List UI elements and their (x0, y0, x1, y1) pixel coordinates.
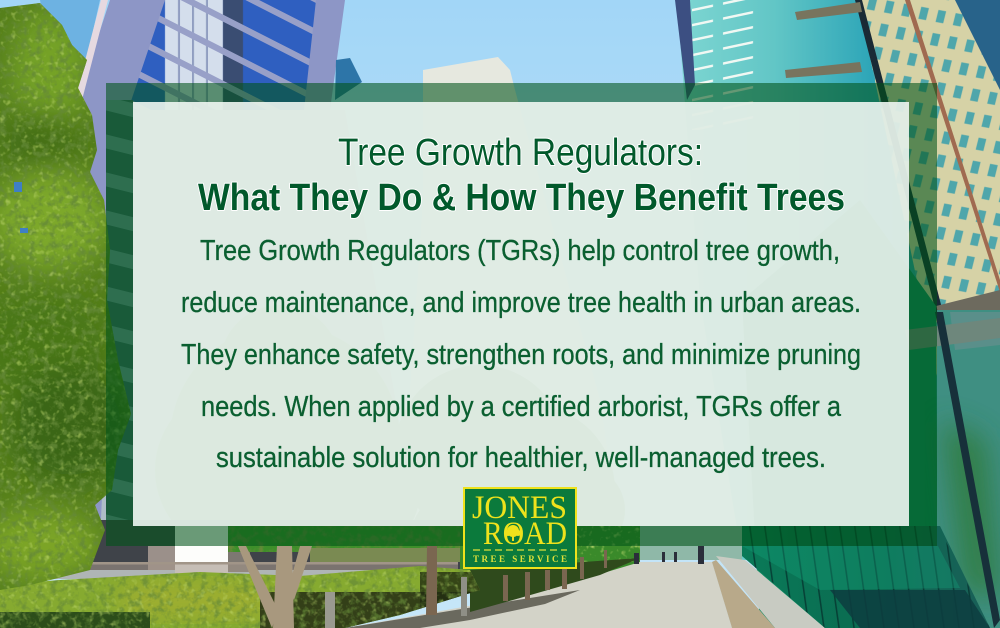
logo: Jones Road Tree Service: JONES (472, 490, 567, 526)
icon: tree in the O (505, 525, 521, 541)
right glass tower (675, 0, 1000, 628)
body paragraph: Tree Growth Regulators (TGRs) help control tree growth, (200, 235, 840, 267)
body paragraph: reduce maintenance, and improve tree health in urban areas. (181, 287, 861, 319)
shrubs along walkway (470, 558, 640, 612)
tree trunks (238, 546, 607, 628)
distant pale buildings (640, 526, 742, 560)
body paragraph (181, 235, 861, 474)
hedge (0, 566, 480, 628)
left office tower (20, 0, 420, 560)
title line 2: What They Do & How They Benefit Trees (198, 177, 845, 219)
title (198, 132, 845, 219)
body paragraph: sustainable solution for healthier, well-managed trees. (216, 442, 826, 474)
walkway (345, 562, 732, 628)
logo: Jones Road Tree Service (464, 488, 576, 568)
title line 1: Tree Growth Regulators: (338, 132, 703, 174)
dark green translucent frame (106, 83, 937, 546)
tree canopies around walkway (228, 526, 642, 576)
translucent light panel (133, 102, 909, 526)
body paragraph: needs. When applied by a certified arborist, TGRs offer a (201, 391, 842, 423)
distant people (634, 546, 704, 564)
sky gaps in foliage (14, 182, 28, 233)
building base and white block (90, 520, 490, 574)
left foreground tree (0, 0, 135, 600)
central pale tower (400, 57, 620, 540)
body paragraph: They enhance safety, strengthen roots, and minimize pruning (181, 339, 861, 371)
logo: Jones Road Tree Service: ROAD (483, 516, 567, 552)
small rooftop structure (335, 58, 362, 100)
distant background trees seen through panel (155, 305, 625, 590)
left glass tower (40, 0, 100, 110)
fence (18, 562, 458, 579)
ramp and railing (712, 560, 775, 628)
glass wall lower right (742, 526, 990, 628)
logo: Jones Road Tree Service: TREE SERVICE (473, 554, 567, 564)
